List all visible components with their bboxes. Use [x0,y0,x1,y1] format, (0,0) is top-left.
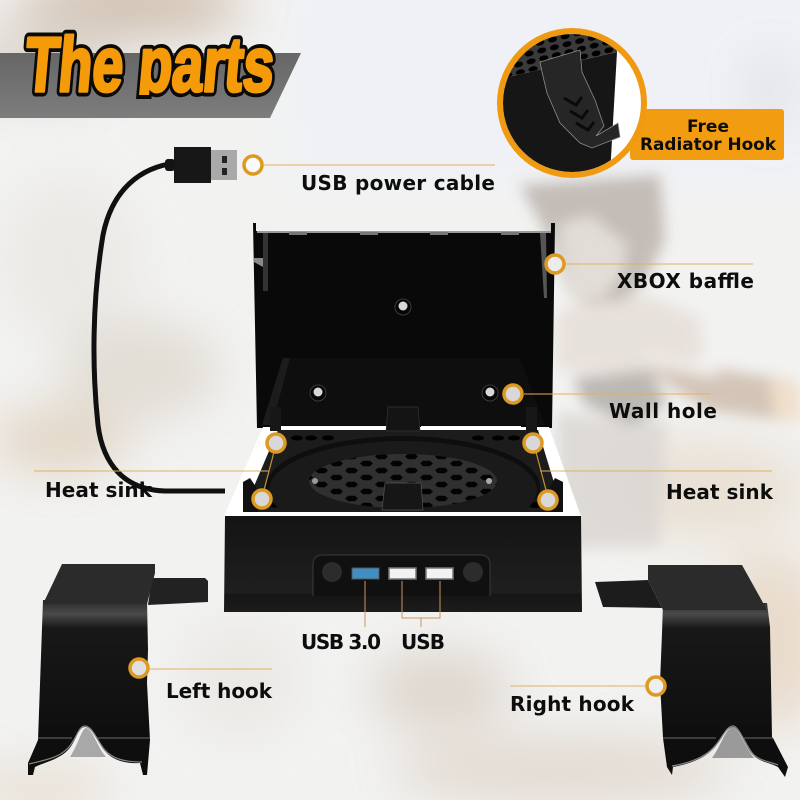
title [24,30,276,99]
title: The parts [22,22,278,108]
callout: left hook [130,659,273,703]
port: usb right [426,568,453,579]
callout: xbox baffle [546,255,754,293]
callout: wall hole: Wall hole [609,399,717,423]
port: usb 3.0 [352,568,379,579]
lid [253,223,555,428]
callout: usb power cable [244,156,495,195]
usb power cable [94,147,237,491]
product: fan base with lid [224,223,582,612]
right hook [595,565,788,777]
tray [224,406,581,516]
inset: free radiator hook label [630,109,784,160]
callout: heat sink left: Heat sink [45,478,153,502]
inset: free radiator hook label: Radiator Hook [640,135,777,155]
left hook [28,564,208,775]
inset: free radiator hook label: Free [687,117,729,137]
callout: usb power cable: USB power cable [301,171,495,195]
callout: heat sink right: Heat sink [666,480,774,504]
callout: heat sink right [524,434,774,509]
title banner [0,53,301,118]
callout: wall hole [504,385,717,423]
callout: usb: USB [401,630,445,654]
callout: usb 3.0: USB 3.0 [301,630,381,654]
callout: right hook [510,677,665,716]
front body [224,516,582,612]
callout: heat sink left [34,434,285,508]
callout: left hook: Left hook [166,679,273,703]
inset: hook on console circle [495,25,647,180]
callout: right hook: Right hook [510,692,635,716]
callout: usb [401,581,445,654]
callout: xbox baffle: XBOX baffle [617,269,754,293]
callout: usb 3.0 [301,581,381,654]
title: The parts [22,22,278,108]
port: usb left [389,568,416,579]
